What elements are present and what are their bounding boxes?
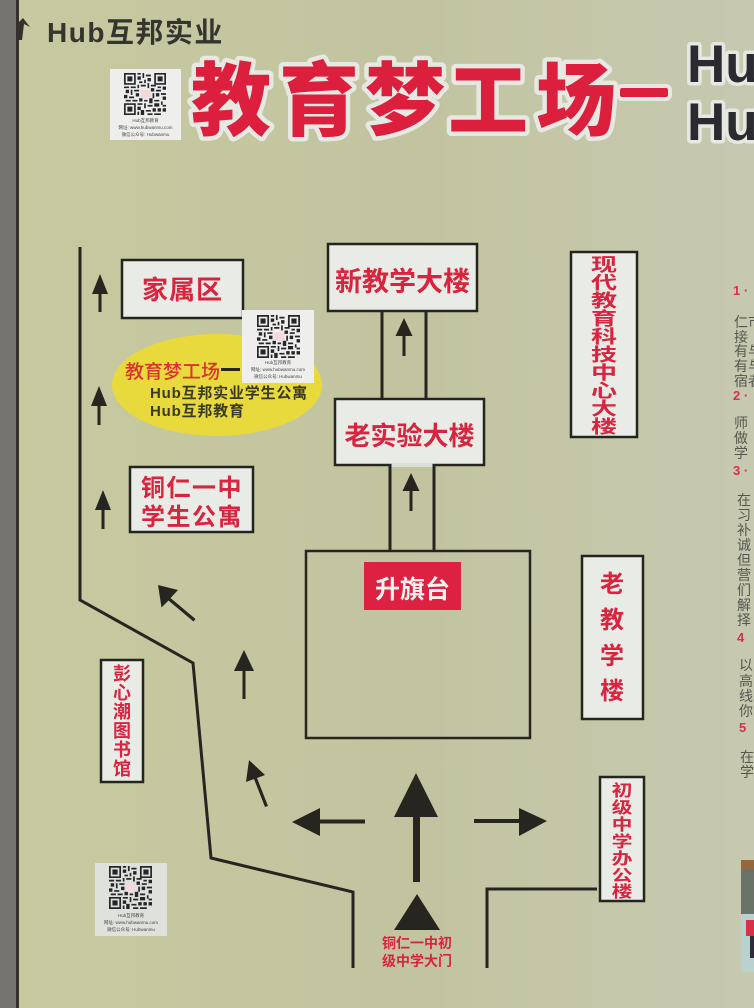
qr sticker: bottom: 网址: www.hubwanmu.com	[104, 919, 158, 926]
arrow: up-left upper	[158, 585, 196, 622]
arrow: left road 2	[91, 386, 107, 425]
main title: 教育梦工场	[191, 37, 616, 153]
box: modern education technology center	[571, 252, 637, 437]
arrow: to new teaching building	[396, 318, 412, 356]
box: student apartment	[130, 467, 253, 532]
right text column (cropped): 你	[739, 703, 753, 719]
qr sticker: top: 微信公众号: Hubwanmu	[122, 131, 170, 138]
box: old teaching building: 楼	[600, 678, 624, 705]
gate label: 铜仁一中初	[382, 935, 452, 951]
right text column (cropped)	[733, 283, 754, 780]
right text column (cropped): 习	[737, 507, 751, 523]
brand heading: Hub互邦实业	[47, 17, 224, 48]
box: library: 馆	[113, 758, 131, 779]
right text column (cropped): 5	[739, 720, 746, 735]
box: junior high office: 级	[612, 798, 633, 816]
qr sticker: bottom	[95, 863, 167, 936]
box: modern education technology center: 代	[591, 273, 617, 293]
box: junior high office: 中	[612, 815, 632, 833]
right text column (cropped): 4	[737, 630, 745, 645]
flag square	[306, 551, 530, 738]
right text column (cropped): 营	[737, 567, 751, 583]
right text column (cropped): 但	[737, 552, 751, 568]
box: junior high office: 初	[612, 781, 632, 799]
box: library: 图	[113, 721, 131, 741]
box: modern education technology center: 心	[591, 381, 617, 401]
arrow: left road 3	[95, 490, 111, 529]
box: student apartment: 学生公寓	[141, 504, 243, 531]
right text column (cropped): 诚	[737, 537, 751, 553]
right text column (cropped): 在	[737, 492, 751, 508]
cropped photo	[741, 860, 754, 972]
right text column (cropped): 线	[739, 688, 753, 704]
arrow: big centre	[394, 773, 438, 882]
qr sticker: map	[242, 310, 314, 383]
right text column (cropped): 在	[740, 749, 754, 765]
right text column (cropped): 高	[739, 673, 753, 689]
right text column (cropped): 学	[734, 445, 748, 461]
right text column (cropped): 补	[737, 522, 751, 538]
box: modern education technology center: 楼	[591, 417, 617, 437]
yellow callout	[112, 334, 322, 436]
label: flag platform: 升旗台	[375, 575, 450, 604]
box: modern education technology center: 育	[591, 308, 617, 329]
label: flag platform	[364, 562, 461, 610]
gate triangle	[394, 894, 440, 930]
metal frame	[0, 0, 30, 1008]
qr sticker: bottom: Hub互邦教育	[118, 912, 145, 919]
right text column (cropped): 3 ·	[733, 463, 748, 478]
right text column (cropped): 做	[734, 430, 748, 446]
qr sticker: top: 网址: www.hubwanmu.com	[118, 124, 173, 131]
right text column (cropped): 择	[737, 612, 751, 628]
gate label	[382, 935, 452, 969]
box: junior high office: 公	[612, 866, 633, 884]
right text column (cropped): 们	[737, 582, 751, 598]
box: modern education technology center: 科	[591, 327, 617, 347]
road outlines	[80, 247, 597, 968]
box: junior high office	[600, 777, 644, 901]
gate label: 级中学大门	[382, 953, 452, 969]
box: library	[101, 660, 143, 782]
qr sticker: top: Hub互邦教育	[132, 117, 159, 124]
box: modern education technology center: 大	[591, 399, 617, 419]
qr sticker: bottom: 微信公众号: Hubwanmu	[107, 926, 155, 933]
yellow callout: 教育梦工场	[125, 361, 220, 383]
arrow: up-left lower	[246, 760, 268, 807]
box: library: 心	[113, 683, 131, 703]
arrow: left	[292, 808, 365, 836]
box: family area: 家属区	[142, 275, 223, 305]
right text column (cropped): 以	[739, 657, 753, 673]
right text column (cropped): 1 ·	[733, 283, 748, 298]
box: new teaching building	[328, 244, 477, 311]
box: new teaching building: 新教学大楼	[335, 267, 470, 297]
box: old teaching building: 教	[600, 607, 624, 634]
box: old lab building: 老实验大楼	[344, 421, 475, 451]
box: old teaching building: 老	[600, 571, 624, 598]
box: junior high office: 办	[612, 849, 633, 867]
qr sticker: top	[110, 69, 181, 140]
qr sticker: map: 微信公众号: Hubwanmu	[254, 373, 302, 380]
arrow: left road 1	[92, 274, 108, 312]
arrow: right	[474, 808, 547, 836]
right text column (cropped): 解	[737, 597, 751, 613]
box: junior high office: 学	[612, 832, 632, 850]
yellow callout: Hub互邦教育	[150, 402, 245, 420]
qr sticker: map: Hub互邦教育	[265, 359, 292, 366]
box: modern education technology center: 教	[591, 291, 617, 311]
box: old teaching building: 学	[600, 643, 624, 670]
box: student apartment: 铜仁一中	[141, 475, 243, 502]
qr sticker: map: 网址: www.hubwanmu.com	[251, 366, 305, 373]
box: library: 彭	[113, 664, 131, 684]
right text column (cropped): 师	[734, 415, 748, 431]
box: old teaching building	[582, 556, 643, 719]
right text column (cropped): 2 ·	[733, 388, 748, 403]
right text column (cropped): 学	[740, 764, 754, 780]
box: library: 潮	[113, 702, 131, 722]
yellow callout: Hub互邦实业学生公寓	[150, 384, 308, 402]
box: family area	[122, 260, 243, 318]
box: library: 书	[113, 740, 131, 760]
arrow: to old lab building	[402, 473, 420, 511]
box: modern education technology center: 现	[591, 255, 617, 275]
box: modern education technology center: 技	[591, 345, 618, 365]
arrow: up middle	[234, 650, 254, 699]
right text column (cropped): 接	[734, 329, 748, 345]
box: junior high office: 楼	[612, 882, 633, 900]
box: old lab building	[335, 399, 484, 467]
box: modern education technology center: 中	[591, 363, 617, 383]
